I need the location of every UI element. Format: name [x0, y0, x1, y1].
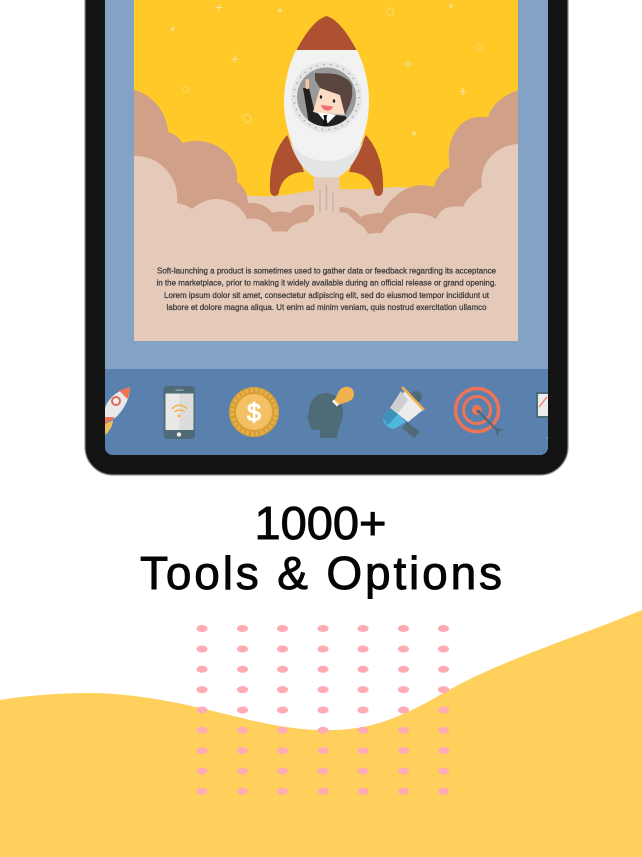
sparkles — [171, 4, 482, 135]
title: Tools & Options — [140, 547, 502, 599]
body text: Soft-launching a product is sometimes used to gather data or feedback regarding its acceptance — [157, 266, 496, 276]
icon: head with lightbulb — [307, 387, 354, 438]
title: 1000+ — [254, 497, 386, 549]
horizon haze — [246, 187, 410, 217]
porthole — [291, 62, 362, 132]
title — [140, 497, 502, 599]
astronaut — [303, 73, 352, 126]
icon: dollar coin — [229, 387, 279, 437]
rocket — [270, 16, 383, 220]
nose cone — [296, 16, 356, 50]
icon dock — [105, 369, 548, 455]
icon: smartphone — [164, 386, 195, 439]
icon: target with arrow — [456, 388, 505, 437]
back cloud — [134, 90, 518, 234]
body text — [156, 266, 496, 312]
front cloud — [134, 144, 518, 341]
poster panel — [134, 0, 518, 341]
body text: in the marketplace, prior to making it widely available during an official release or grand opening. — [156, 278, 496, 288]
body text: labore et dolore magna aliqua. Ut enim ad minim veniam, quis nostrud exercitation ullamco — [166, 302, 487, 312]
icon: megaphone — [383, 387, 424, 438]
body text: Lorem ipsum dolor sit amet, consectetur adipiscing elit, sed do eiusmod tempor incididunt ut — [164, 290, 490, 300]
background wave — [0, 610, 642, 857]
tablet screen — [105, 0, 548, 455]
body — [284, 50, 369, 178]
icon: presentation board — [536, 392, 548, 439]
dot grid — [196, 625, 449, 795]
icon: dollar coin: $ — [247, 399, 261, 427]
icon: rocket — [105, 387, 130, 435]
tablet frame — [85, 0, 568, 475]
fins — [270, 135, 304, 196]
exhaust — [314, 176, 340, 215]
